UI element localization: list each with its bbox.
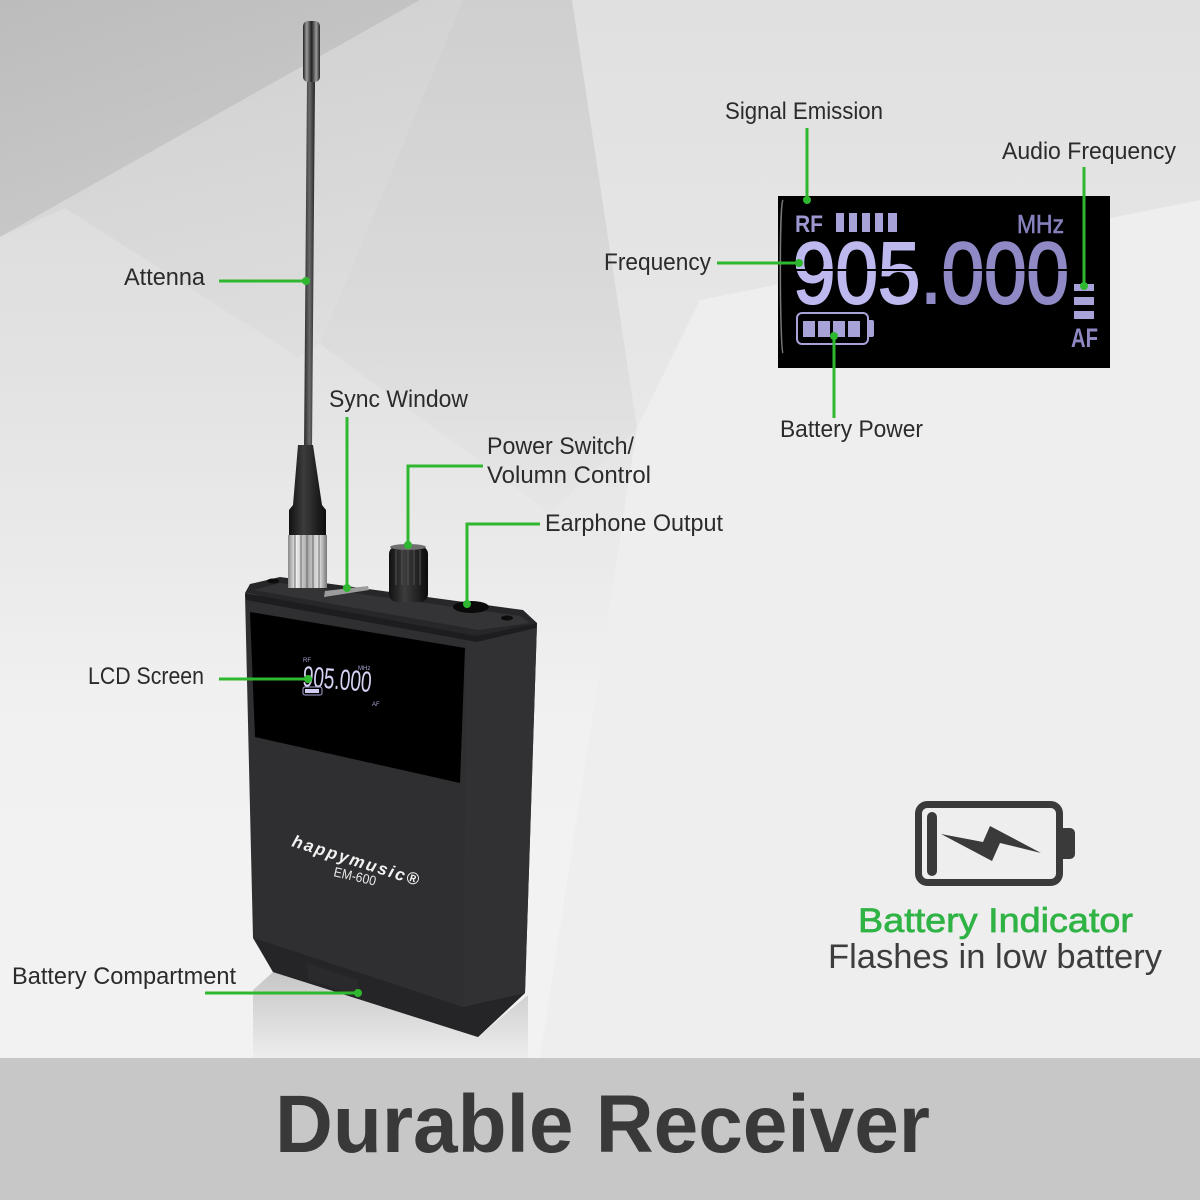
receiver device [245, 21, 537, 1037]
antenna tip [303, 21, 320, 82]
callout labels: Volumn Control [487, 462, 651, 489]
signal bars [836, 213, 897, 232]
RF label: RF [795, 211, 823, 238]
callout leader lines [205, 128, 1088, 997]
LCD enlarged panel [778, 196, 1110, 368]
small LCD readout: AF [372, 702, 380, 708]
callout labels: Sync Window [329, 386, 469, 413]
small LCD readout [301, 658, 380, 708]
callout labels: Attenna [124, 264, 206, 291]
LCD screen panel [250, 612, 465, 783]
title band [0, 1058, 1200, 1200]
small LCD readout: RF [303, 658, 311, 664]
callout labels: Signal Emission [725, 98, 883, 125]
audio level bars [1074, 284, 1094, 319]
compartment door [307, 963, 358, 996]
frequency readout: 905.000 [793, 225, 1069, 322]
brand logo: happymusic® [290, 832, 422, 890]
callout labels [12, 98, 1176, 990]
callout labels: Earphone Output [545, 510, 723, 537]
callout labels: Battery Power [780, 416, 923, 443]
battery compartment edge [254, 938, 525, 1037]
AF label: AF [1071, 323, 1098, 353]
antenna connector [289, 445, 326, 535]
icon: low battery [918, 804, 1075, 882]
callout labels: Power Switch/ [487, 433, 634, 460]
battery indicator heading: Battery Indicator [858, 902, 1133, 940]
screw holes [267, 578, 513, 620]
device reflection [253, 972, 528, 1058]
title: Durable Receiver [275, 1079, 930, 1170]
small LCD readout: MHz [358, 666, 370, 672]
callout labels: Frequency [604, 249, 711, 276]
battery gauge [797, 313, 874, 344]
device top face [245, 577, 537, 636]
device body [245, 594, 537, 1037]
MHz label: MHz [1017, 209, 1064, 239]
model number: EM-600 [332, 864, 378, 889]
device side band [463, 623, 537, 1007]
antenna metal base [288, 535, 327, 588]
callout labels: Audio Frequency [1002, 138, 1176, 165]
battery indicator note: Flashes in low battery [828, 938, 1162, 976]
power knob [389, 544, 428, 602]
earphone jack [453, 601, 489, 613]
sync window [324, 586, 369, 597]
callout labels: LCD Screen [88, 663, 204, 690]
small LCD readout: 905.000 [301, 661, 373, 699]
callout labels: Battery Compartment [12, 963, 236, 990]
antenna whip [304, 80, 315, 450]
